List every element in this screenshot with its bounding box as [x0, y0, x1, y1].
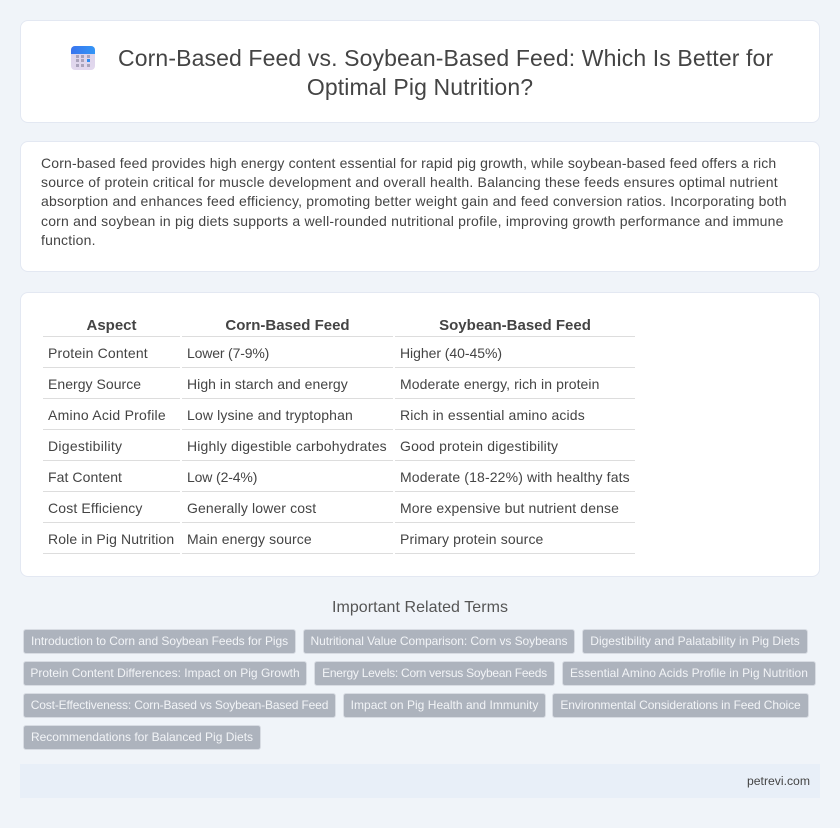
title: Corn-Based Feed vs. Soybean-Based Feed: Which Is Better for [118, 45, 773, 71]
text block: introduction paragraph: Corn-based feed provides high energy content essential for rapid pig growth, while soybean-based feed offers a rich [41, 155, 776, 171]
table: corn vs soybean comparison: Moderate energy, rich in protein [400, 376, 600, 392]
tag list: related terms: Impact on Pig Health and Immunity [351, 698, 538, 712]
title: Optimal Pig Nutrition? [307, 74, 533, 100]
tag list: related terms [23, 629, 816, 750]
heading: important related terms: Important Related Terms [332, 599, 508, 616]
text block: introduction paragraph [41, 155, 787, 248]
table: corn vs soybean comparison: Aspect [86, 317, 137, 334]
table: corn vs soybean comparison: Rich in essential amino acids [400, 407, 585, 423]
table: corn vs soybean comparison: Good protein digestibility [400, 438, 558, 454]
tag list: related terms: Introduction to Corn and Soybean Feeds for Pigs [31, 634, 288, 648]
table: corn vs soybean comparison: Lower (7-9%) [187, 345, 269, 361]
table: corn vs soybean comparison: Soybean-Based Feed [439, 317, 591, 334]
table: corn vs soybean comparison: Amino Acid Profile [48, 407, 166, 423]
table: corn vs soybean comparison: Moderate (18-22%) with healthy fats [400, 469, 630, 485]
table: corn vs soybean comparison: More expensive but nutrient dense [400, 500, 619, 516]
table: corn vs soybean comparison [43, 317, 635, 554]
tag list: related terms: Environmental Considerations in Feed Choice [560, 698, 801, 712]
panel: comparison table [20, 292, 820, 577]
tag list: related terms: Energy Levels: Corn versus Soybean Feeds [322, 666, 547, 680]
table: corn vs soybean comparison: Digestibility [48, 438, 122, 454]
icon: calendar [71, 46, 95, 70]
footer text: site name: petrevi.com [747, 774, 810, 788]
table: corn vs soybean comparison: Higher (40-45%) [400, 345, 502, 361]
text block: introduction paragraph: function. [41, 232, 96, 248]
table: corn vs soybean comparison: Primary protein source [400, 531, 543, 547]
table: corn vs soybean comparison: Highly digestible carbohydrates [187, 438, 387, 454]
panel: title header [20, 20, 820, 123]
table: corn vs soybean comparison: Protein Content [48, 345, 148, 361]
table: corn vs soybean comparison: Energy Source [48, 376, 141, 392]
footer bar [20, 764, 820, 798]
tag list: related terms: Protein Content Differences: Impact on Pig Growth [30, 666, 300, 680]
table: corn vs soybean comparison: Corn-Based Feed [225, 317, 350, 334]
table: corn vs soybean comparison: Generally lower cost [187, 500, 316, 516]
table: corn vs soybean comparison: Fat Content [48, 469, 122, 485]
tag list: related terms: Digestibility and Palatability in Pig Diets [590, 634, 800, 648]
text block: introduction paragraph: source of protein critical for muscle development and overall health. Balancing these feeds ensures optimal nutrient [41, 174, 778, 190]
table: corn vs soybean comparison: Role in Pig Nutrition [48, 531, 174, 547]
table: corn vs soybean comparison: Main energy source [187, 531, 312, 547]
tag list: related terms: Recommendations for Balanced Pig Diets [31, 730, 253, 744]
text block: introduction paragraph: absorption and enhances feed efficiency, promoting better weight gain and feed conversion ratios. Incorporating both [41, 193, 787, 209]
title [118, 45, 773, 100]
table: corn vs soybean comparison: High in starch and energy [187, 376, 348, 392]
table: corn vs soybean comparison: Cost Efficiency [48, 500, 143, 516]
text block: introduction paragraph: corn and soybean in pig diets supports a well-rounded nutritional profile, improving growth performance and immune [41, 213, 784, 229]
tag list: related terms: Essential Amino Acids Profile in Pig Nutrition [570, 666, 808, 680]
tag list: related terms: Nutritional Value Comparison: Corn vs Soybeans [311, 634, 567, 648]
table: corn vs soybean comparison: Low (2-4%) [187, 469, 257, 485]
tag list: related terms: Cost-Effectiveness: Corn-Based vs Soybean-Based Feed [31, 698, 328, 712]
table: corn vs soybean comparison: Low lysine and tryptophan [187, 407, 353, 423]
panel: introduction [20, 141, 820, 272]
